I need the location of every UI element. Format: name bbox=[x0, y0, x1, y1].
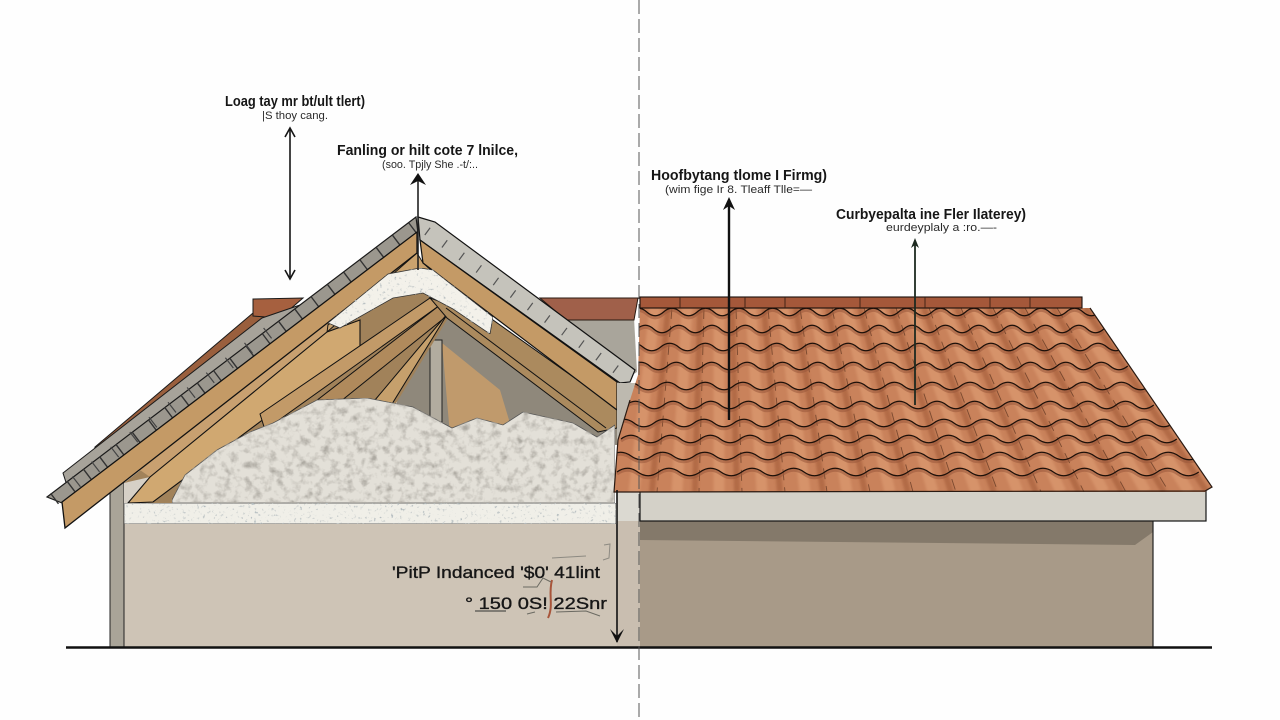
callout: tile roof label: Hoofbytang tlome I Firmg) bbox=[651, 168, 827, 184]
tile shadows bbox=[652, 308, 1207, 492]
callout: ridge label: (soo. Tpjly She .-t/:.. bbox=[382, 159, 478, 171]
tile highlights bbox=[634, 308, 1189, 492]
panel: left main rafter bbox=[62, 232, 417, 528]
panel: right wall bbox=[617, 521, 1153, 647]
dashed centre divider bbox=[638, 0, 640, 720]
panel: inner left rafters bbox=[124, 253, 450, 503]
tile column separators bbox=[657, 308, 1169, 492]
panel: insulation over top chord bbox=[328, 268, 493, 334]
callout: wall data text: ° 150 0S! 22Snr bbox=[465, 594, 607, 613]
panel: back ridge brown band bbox=[540, 298, 638, 320]
arrow: double-headed load arrow bbox=[285, 128, 295, 279]
arrow: ridge pointer bbox=[410, 173, 426, 270]
callout: tile fixing label: Curbyepalta ine Fler Ilaterey) bbox=[836, 207, 1026, 223]
panel: left roof grey shingles bbox=[47, 217, 418, 503]
ground line bbox=[66, 646, 1212, 649]
panel: blown insulation mound bbox=[172, 398, 615, 503]
wall crack marks bbox=[523, 544, 610, 618]
callout: wall data text bbox=[392, 563, 607, 613]
panel: fascia board bbox=[617, 490, 1206, 521]
panel: insulation base layer bbox=[124, 503, 616, 524]
panel: attic space behind the framing bbox=[395, 290, 637, 445]
panel: left wall bbox=[110, 482, 617, 647]
tile row shadows bbox=[610, 310, 1200, 478]
arrow: wall height pointer bbox=[610, 490, 624, 643]
callout: tile fixing label: eurdeyplaly a :ro.—- bbox=[886, 222, 997, 234]
panel: grey wall strip beside the tiles bbox=[617, 383, 635, 492]
panel: left roof far brown edge bbox=[95, 298, 303, 450]
arrow: tile roof pointer bbox=[723, 197, 735, 420]
callout: tile roof label bbox=[651, 168, 827, 196]
callout: ridge label: Fanling or hilt cote 7 lnilce, bbox=[337, 143, 518, 159]
panel: terracotta tile roof bbox=[610, 305, 1220, 495]
panel: right roof grey shingles bbox=[418, 217, 635, 383]
callout: top left label bbox=[225, 94, 365, 122]
arrow: tile fixing pointer bbox=[911, 238, 919, 405]
callout: top left label: |S thoy cang. bbox=[262, 110, 328, 122]
panel: right main rafter bbox=[420, 240, 617, 432]
tile row lines bbox=[610, 308, 1200, 476]
panel: ridge board bbox=[640, 297, 1082, 308]
callout: ridge label bbox=[337, 143, 518, 171]
callout: tile fixing label bbox=[836, 207, 1026, 234]
callout: wall data text: 'PitP Indanced '$0' 41lint bbox=[392, 563, 600, 582]
panel: tile roof edge bbox=[614, 308, 1212, 492]
callout: top left label: Loag tay mr bt/ult tlert) bbox=[225, 94, 365, 110]
callout: tile roof label: (wim fige Ir 8. Tleaff Tlle=— bbox=[665, 184, 812, 196]
